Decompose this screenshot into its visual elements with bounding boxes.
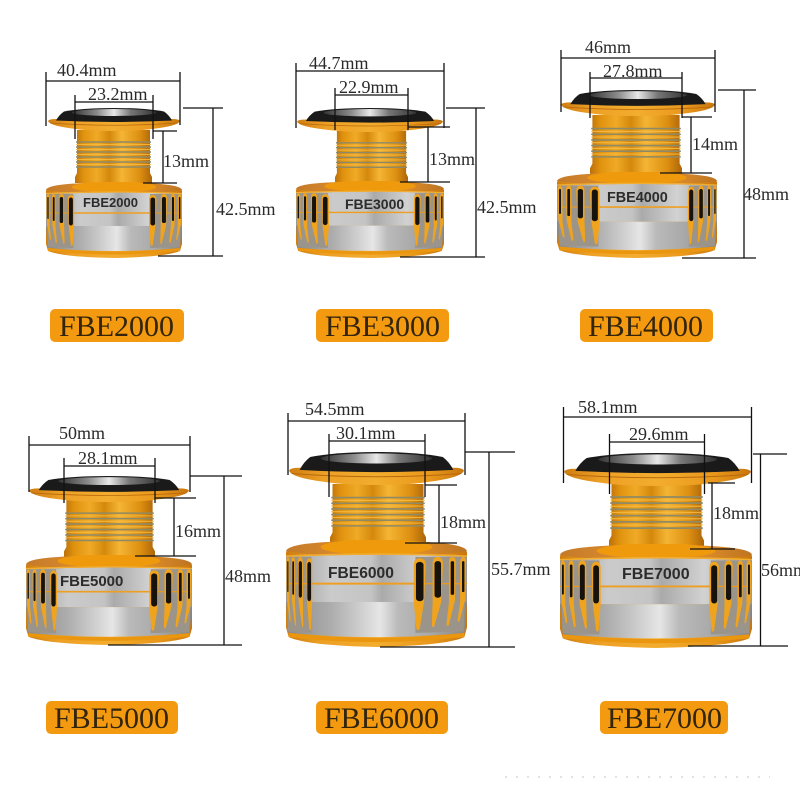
label: FBE2000: FBE2000: [59, 310, 174, 343]
spool: FBE6000: [286, 452, 467, 647]
spool: FBE7000: FBE7000: [622, 566, 690, 583]
dimensions: FBE3000: [296, 53, 537, 257]
spool: FBE3000: [296, 108, 444, 258]
dimensions: FBE2000: 40.4mm: [57, 60, 117, 80]
panel: FBE6000: [286, 399, 551, 735]
spool: FBE3000: FBE3000: [345, 196, 404, 212]
dimensions: FBE2000: 42.5mm: [216, 199, 276, 219]
label: FBE4000: FBE4000: [588, 310, 703, 343]
spool: FBE5000: FBE5000: [60, 573, 123, 590]
spool: FBE4000: [557, 90, 717, 258]
label: FBE6000: FBE6000: [324, 702, 439, 735]
spool: FBE2000: [46, 108, 182, 258]
dimensions: FBE6000: [288, 399, 551, 647]
panel: FBE7000: [560, 397, 800, 735]
dimensions: FBE5000: [29, 423, 271, 645]
label: FBE5000: FBE5000: [54, 702, 169, 735]
label: FBE3000: FBE3000: [325, 310, 440, 343]
dimensions: FBE5000: 16mm: [175, 521, 221, 541]
label: FBE7000: FBE7000: [607, 702, 722, 735]
dimensions: FBE5000: 48mm: [225, 566, 271, 586]
spool: FBE2000: FBE2000: [83, 195, 138, 210]
spool: FBE7000: [560, 453, 752, 648]
dimensions: FBE4000: 27.8mm: [603, 61, 663, 81]
dimensions: FBE7000: [564, 397, 800, 646]
spool: FBE5000: [26, 476, 192, 645]
dimensions: FBE4000: 48mm: [743, 184, 789, 204]
dimensions: FBE4000: 14mm: [692, 134, 738, 154]
dimensions: FBE3000: 13mm: [429, 149, 475, 169]
dimensions: FBE4000: 46mm: [585, 37, 631, 57]
dimensions: FBE3000: 44.7mm: [309, 53, 369, 73]
dimensions: FBE3000: 42.5mm: [477, 197, 537, 217]
dimensions: FBE5000: 28.1mm: [78, 448, 138, 468]
panel: FBE3000: [296, 53, 537, 343]
panel: FBE5000: [26, 423, 271, 735]
dimensions: FBE6000: 30.1mm: [336, 423, 396, 443]
dimensions: FBE7000: 58.1mm: [578, 397, 638, 417]
dimensions: FBE7000: 29.6mm: [629, 424, 689, 444]
dimensions: FBE7000: 18mm: [713, 503, 759, 523]
dimensions: FBE3000: 22.9mm: [339, 77, 399, 97]
panel: FBE2000: [46, 60, 276, 343]
dimensions: FBE6000: 54.5mm: [305, 399, 365, 419]
panel: FBE4000: [557, 37, 789, 343]
dimensions: FBE2000: 13mm: [163, 151, 209, 171]
dimensions: FBE5000: 50mm: [59, 423, 105, 443]
dimensions: FBE6000: 18mm: [440, 512, 486, 532]
spool: FBE4000: FBE4000: [607, 190, 668, 206]
spool: FBE6000: FBE6000: [328, 565, 394, 582]
dimensions: FBE2000: [46, 60, 276, 256]
dimensions: FBE2000: 23.2mm: [88, 84, 148, 104]
dimensions: FBE6000: 55.7mm: [491, 559, 551, 579]
dimensions: FBE4000: [561, 37, 789, 258]
